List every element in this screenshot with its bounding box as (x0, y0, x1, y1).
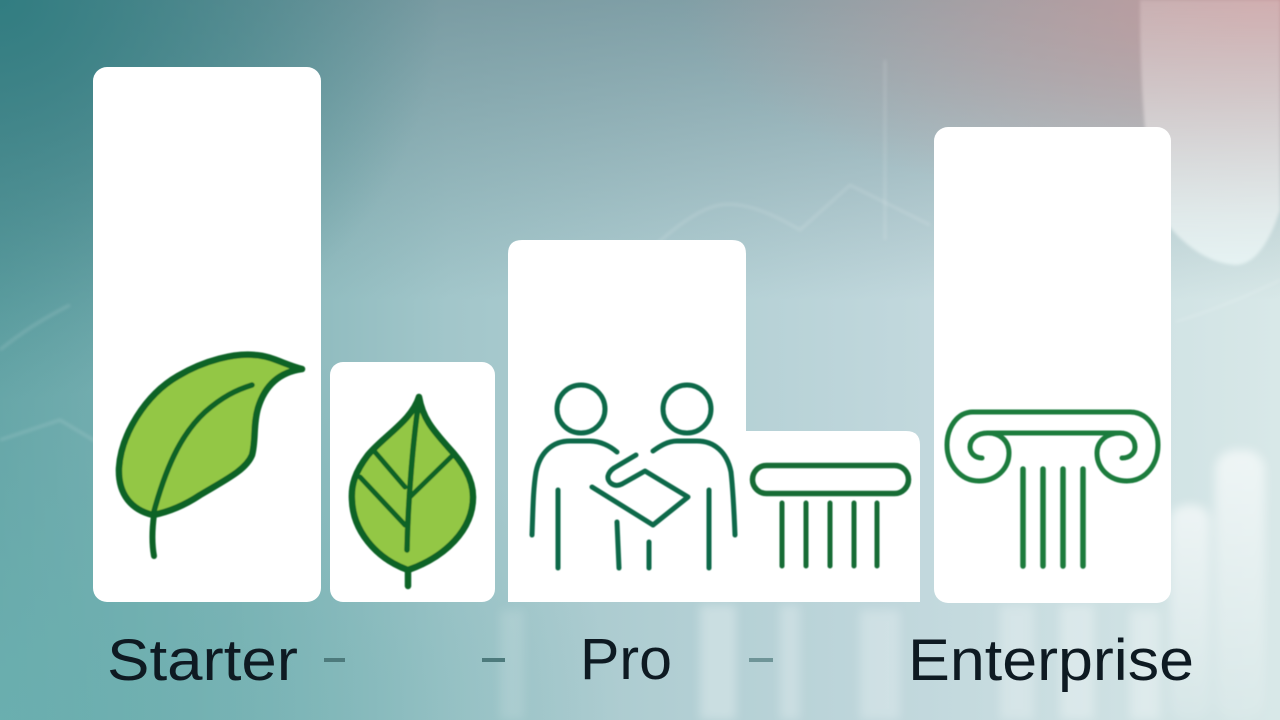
dash before Pro (482, 658, 505, 662)
icon: two people with document (532, 385, 735, 568)
icon: curved leaf (119, 355, 302, 556)
panel: enterprise card (934, 127, 1171, 603)
panel: leaf card (330, 362, 495, 602)
panel: pro card (508, 240, 746, 602)
label: Starter: Starter (107, 628, 298, 693)
label: Pro: Pro (580, 627, 672, 692)
icon: ionic column (947, 412, 1158, 566)
icon: veined leaf (352, 397, 473, 586)
label: Enterprise: Enterprise (908, 628, 1194, 693)
dash after Starter (324, 658, 345, 662)
icon: flat column (752, 466, 908, 566)
panel: short column card (746, 431, 920, 602)
panel: starter tall card (93, 67, 321, 602)
dash after Pro (749, 658, 773, 662)
